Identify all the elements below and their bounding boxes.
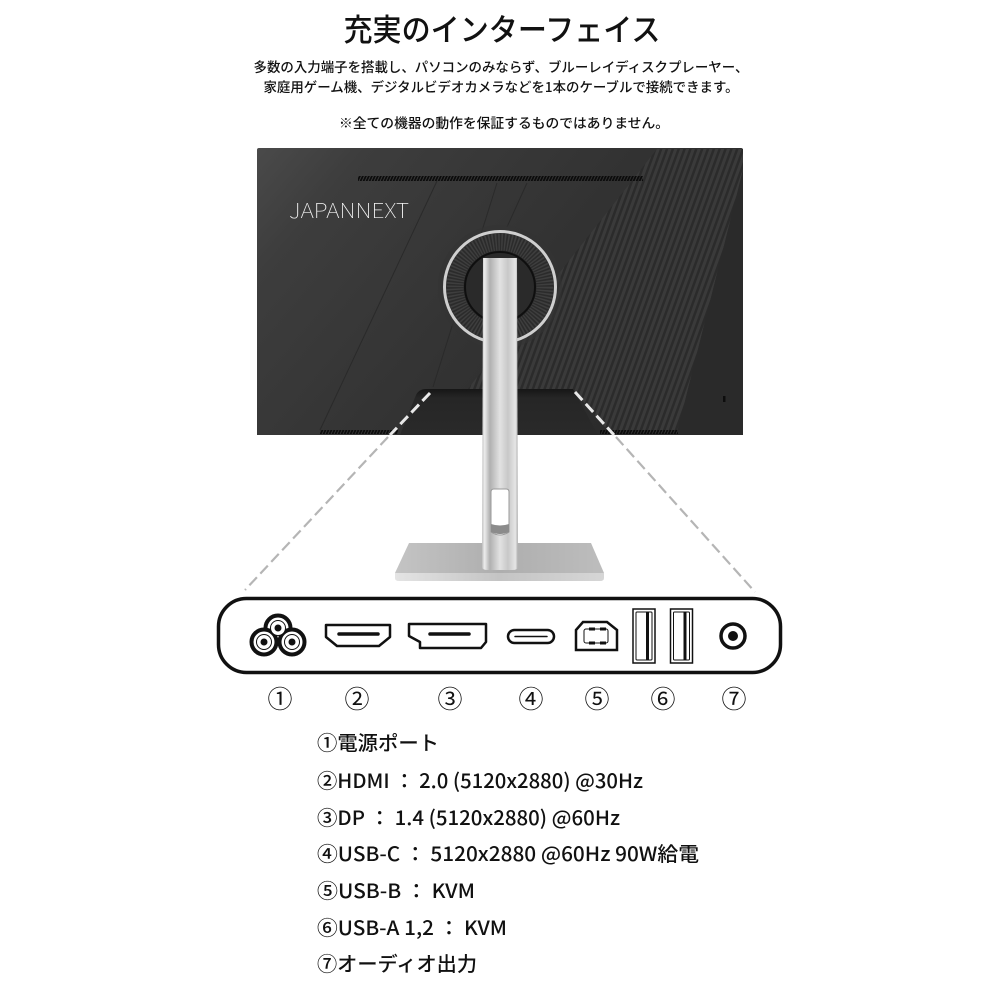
port list: ④USB-C ： 5120x2880 @60Hz 90W給電 (317, 838, 699, 867)
port list: ③DP ： 1.4 (5120x2880) @60Hz (317, 802, 620, 831)
port list: ②HDMI ： 2.0 (5120x2880) @30Hz (317, 765, 643, 794)
icon: audio jack (721, 624, 745, 648)
callout lines (245, 392, 755, 592)
stand base front edge (395, 573, 604, 581)
description text: 家庭用ゲーム機、デジタルビデオカメラなどを1本のケーブルで接続できます。 (264, 76, 738, 96)
description text: 多数の入力端子を搭載し、パソコンのみならず、ブルーレイディスクプレーヤー、 (254, 56, 748, 76)
right callout inside (575, 392, 614, 435)
port numbers: ② (344, 680, 370, 716)
left callout inside (390, 393, 430, 435)
cable hole (491, 489, 509, 535)
striped texture (467, 149, 743, 433)
port list (317, 727, 699, 977)
cable hole inner shadow (491, 524, 509, 534)
port numbers: ⑥ (650, 680, 676, 716)
port list: ⑤USB-B ： KVM (317, 875, 475, 904)
description text (254, 56, 748, 96)
port numbers: ③ (437, 680, 463, 716)
monitor rear (257, 148, 743, 435)
panel seam lines (320, 181, 527, 430)
icon: USB-B port (576, 622, 617, 650)
icon: power port (252, 616, 304, 654)
dark right corner (677, 170, 743, 433)
icon: HDMI port (326, 625, 390, 646)
monitor stand (395, 258, 604, 581)
port numbers: ⑤ (584, 680, 610, 716)
port list: ①電源ポート (317, 727, 439, 756)
brand logo: JAPANNEXT (289, 195, 409, 225)
icon: USB-A ports (633, 609, 692, 663)
stand base (395, 543, 604, 573)
port numbers: ⑦ (721, 680, 747, 716)
top vent (358, 176, 643, 181)
lock slot (723, 396, 726, 402)
right callout outside (616, 437, 755, 592)
stand mount ring (438, 225, 562, 349)
bottom vents (320, 430, 678, 434)
port numbers (267, 680, 747, 716)
monitor back panel (257, 148, 743, 435)
port recess (400, 389, 598, 435)
port numbers: ④ (518, 680, 544, 716)
port numbers: ① (267, 680, 293, 716)
left callout outside (245, 437, 388, 590)
icon: USB-C port (508, 630, 554, 643)
title: 充実のインターフェイス (344, 5, 660, 50)
port panel (218, 598, 780, 672)
port list: ⑦オーディオ出力 (317, 948, 477, 977)
stand neck (482, 258, 518, 570)
port list: ⑥USB-A 1,2 ： KVM (317, 912, 507, 941)
icon: DisplayPort (409, 624, 486, 648)
disclaimer note: ※全ての機器の動作を保証するものではありません。 (339, 112, 669, 132)
